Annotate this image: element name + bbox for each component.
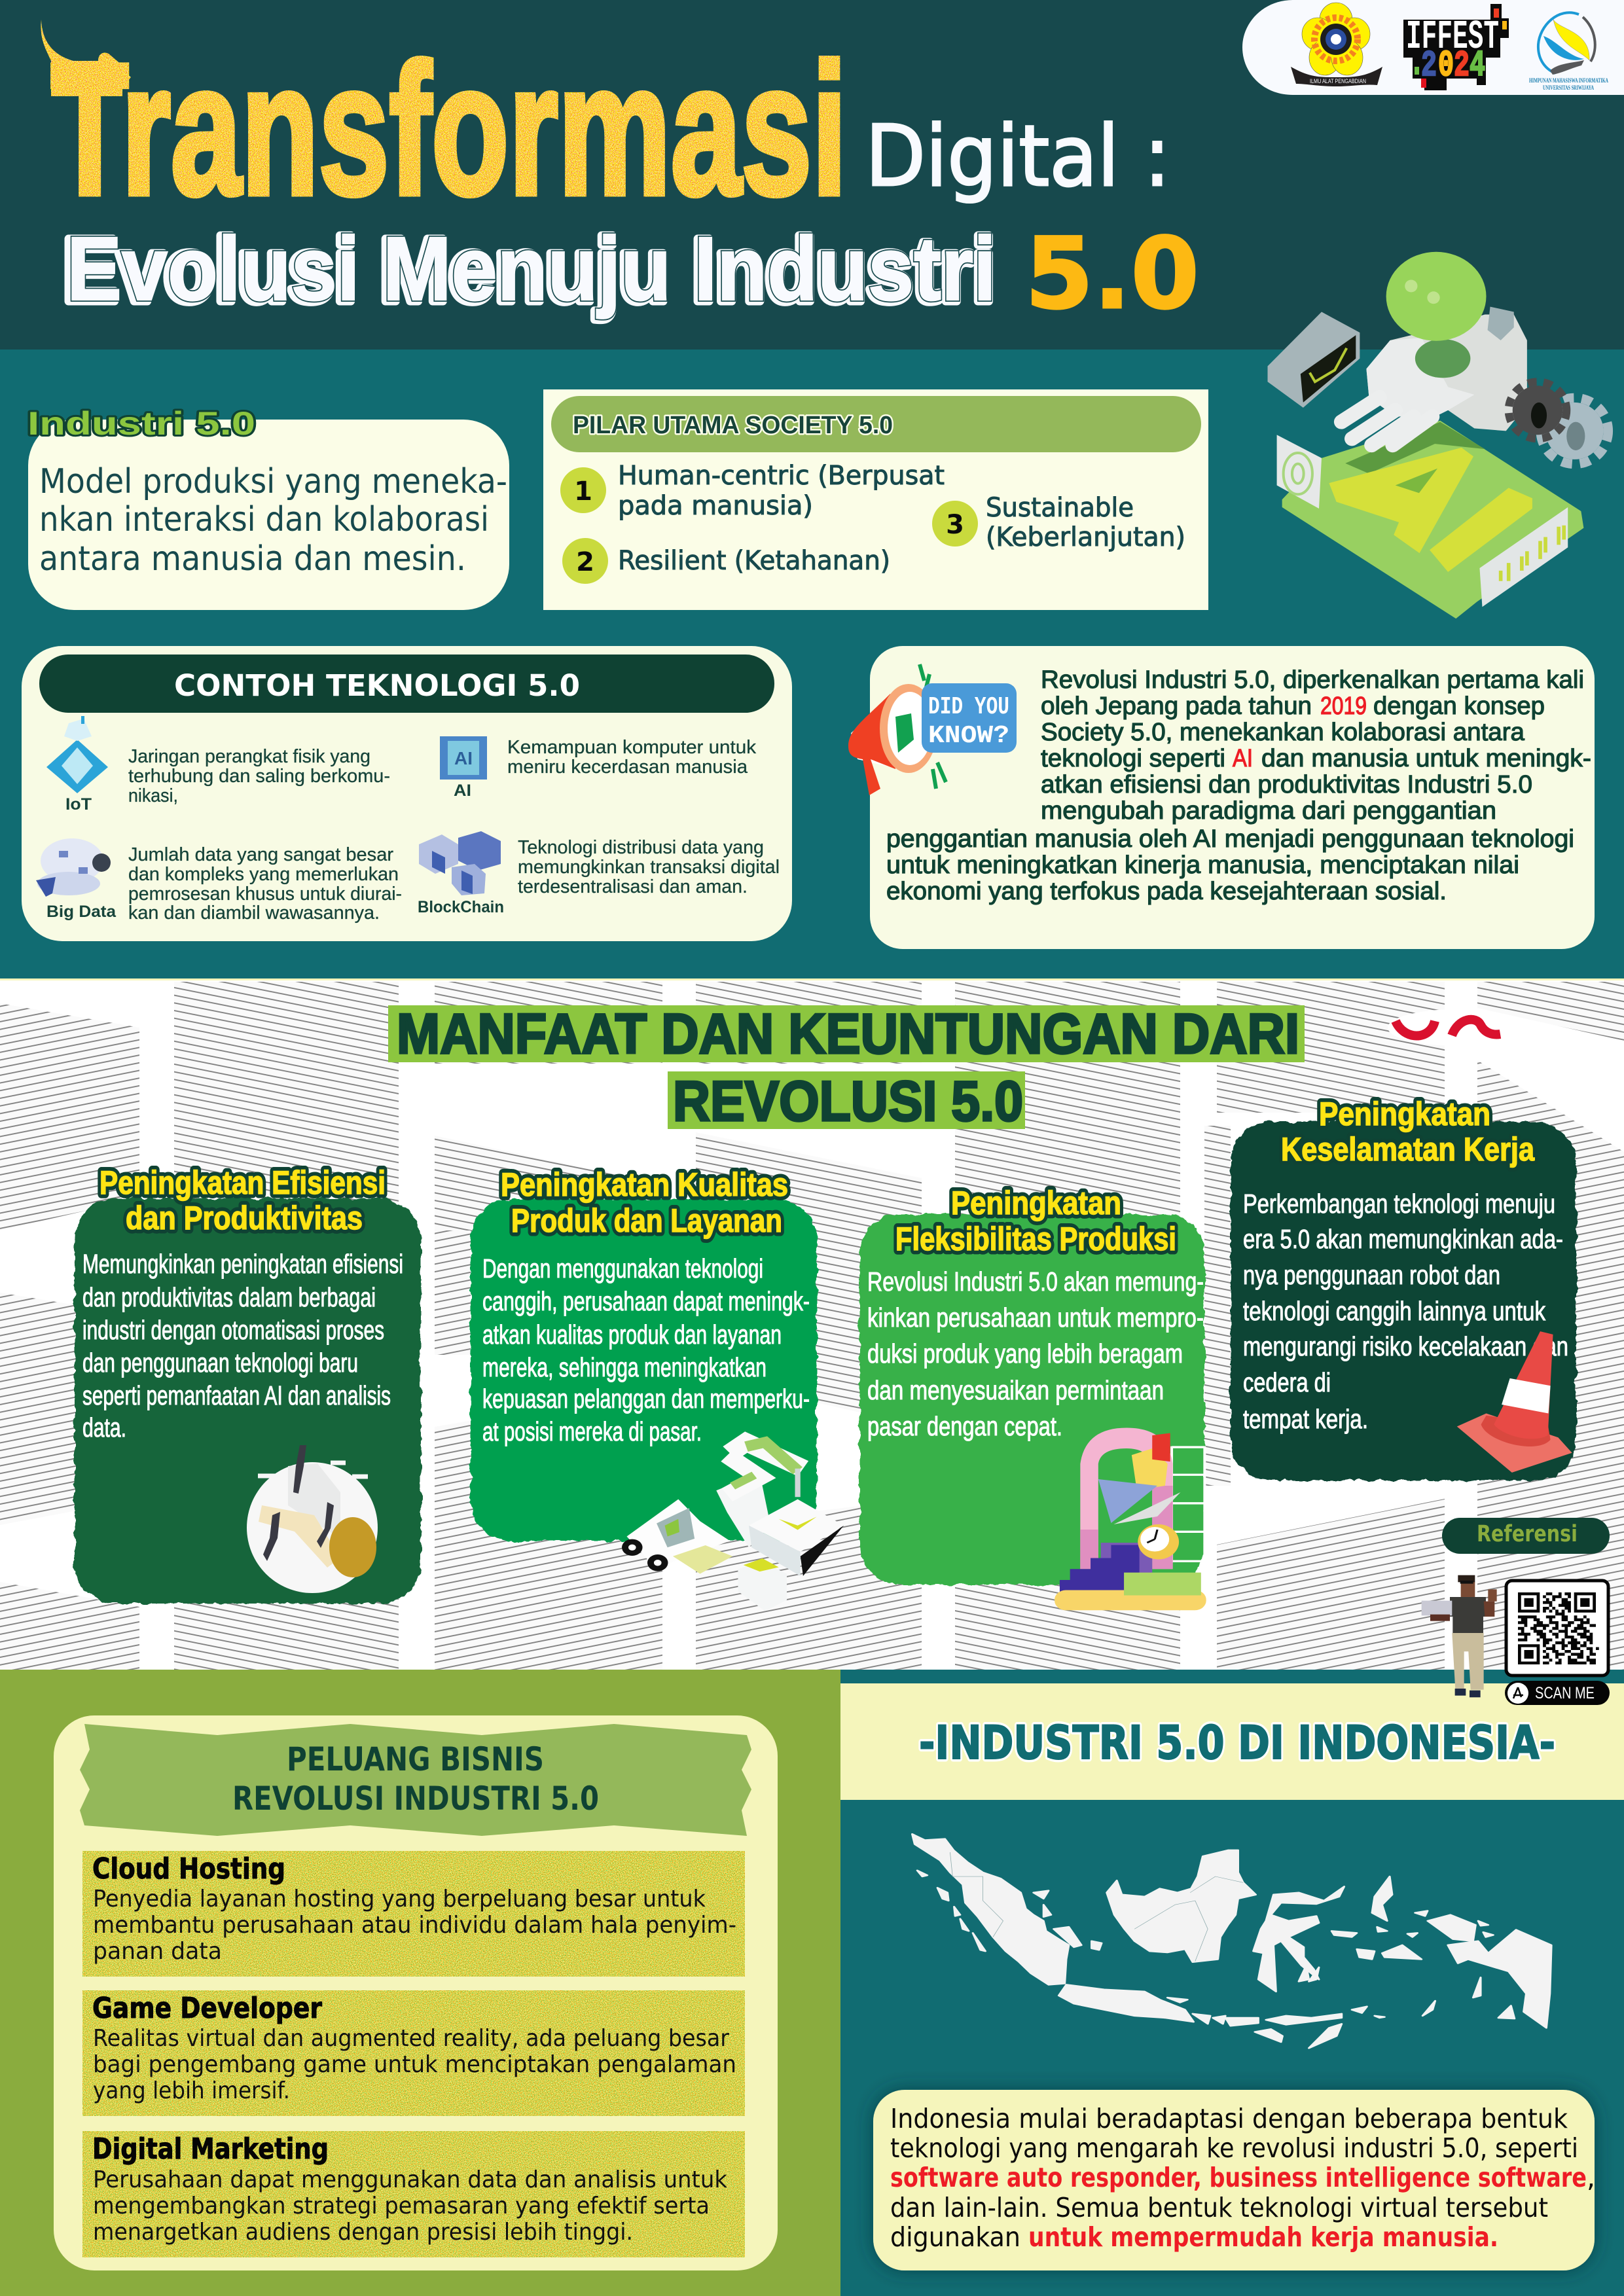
heading pill: PILAR UTAMA SOCIETY 5.0 xyxy=(573,412,893,439)
logo: IFFEST 2024: 4 xyxy=(1470,45,1485,86)
heading: Produk dan Layanan xyxy=(511,1202,782,1239)
icon: did you know badge xyxy=(922,683,1017,753)
card: Game Developer: Game Developer xyxy=(92,1992,322,2025)
text block: definition: antara manusia dan mesin. xyxy=(39,539,466,579)
text block xyxy=(1243,1189,1568,1434)
pill: Referensi xyxy=(1442,1518,1610,1554)
logo: IFFEST 2024: 2 xyxy=(1421,45,1437,86)
text block: cedera di xyxy=(1243,1367,1331,1397)
card: Cloud Hosting: Penyedia layanan hosting yang berpeluang besar untuk xyxy=(93,1886,706,1912)
logo: Himpunan Mahasiswa Informatika xyxy=(1529,12,1608,91)
text block: revolusi industri: untuk meningkatkan kinerja manusia, menciptakan nilai xyxy=(886,852,1519,879)
pillar 2: 2 xyxy=(576,547,594,577)
subtitle: Evolusi Menuju Industri: Evolusi Menuju Industri xyxy=(67,219,996,319)
item: AI: AI xyxy=(454,781,471,800)
icon: red squiggle mark xyxy=(1388,1009,1525,1046)
icon: factory robot and cart xyxy=(622,1443,844,1611)
text block: Revolusi Industri 5.0 akan memung- xyxy=(867,1266,1204,1297)
heading: Peningkatan xyxy=(951,1185,1121,1221)
item: BlockChain xyxy=(418,831,780,916)
heading: Peningkatan xyxy=(951,1185,1121,1221)
heading banner xyxy=(80,1724,751,1836)
text block: nya penggunaan robot dan xyxy=(1243,1260,1500,1290)
text block: revolusi industri: mengubah paradigma dari penggantian xyxy=(1041,797,1496,825)
heading xyxy=(501,1166,788,1239)
text block: kepuasan pelanggan dan memperku- xyxy=(482,1384,810,1414)
text box: Indonesia: dan lain-lain. Semua bentuk teknologi virtual tersebut xyxy=(890,2192,1548,2223)
panel: Peluang Bisnis xyxy=(54,1715,778,2270)
pillar 1 xyxy=(560,461,945,521)
heading: Peningkatan Kualitas xyxy=(501,1166,788,1203)
card: Game Developer: Realitas virtual dan augmented reality, ada peluang besar xyxy=(93,2025,729,2052)
logo: Himpunan Mahasiswa Informatika: UNIVERSITAS SRIWIJAYA xyxy=(1543,84,1594,91)
header band xyxy=(0,0,1624,350)
QR code xyxy=(1506,1581,1608,1676)
panel: Industri 5.0 xyxy=(27,405,509,610)
text block: kinkan perusahaan untuk mempro- xyxy=(867,1302,1204,1333)
icon: coin and climbers xyxy=(247,1445,378,1593)
heading: Fleksibilitas Produksi xyxy=(895,1221,1176,1257)
item: BlockChain: Teknologi distribusi data yang xyxy=(518,837,764,858)
pillar 3: 3 xyxy=(946,510,964,540)
heading: Peningkatan Kualitas xyxy=(501,1166,788,1203)
item: Big Data: dan kompleks yang memerlukan xyxy=(128,864,399,885)
text box: Indonesia: digunakan xyxy=(890,2221,1020,2253)
item: Big Data: Big Data xyxy=(46,903,117,921)
panel: benefit 3 xyxy=(859,1185,1206,1610)
pill: Referensi: Referensi xyxy=(1477,1521,1578,1547)
title xyxy=(41,20,1199,331)
panel: benefit 4 xyxy=(1231,1096,1576,1480)
logo: Universitas Sriwijaya xyxy=(1291,3,1382,86)
heading: Fleksibilitas Produksi xyxy=(895,1221,1176,1257)
icon: did you know badge: KNOW? xyxy=(928,722,1009,750)
icon: IoT gem xyxy=(46,716,108,793)
heading banner: PELUANG BISNIS xyxy=(287,1740,544,1778)
text block: definition: nkan interaksi dan kolaborasi xyxy=(39,500,489,539)
icon: man with laptop xyxy=(1422,1575,1497,1697)
text block: data. xyxy=(82,1412,126,1443)
heading banner: REVOLUSI INDUSTRI 5.0 xyxy=(232,1780,599,1818)
heading: Peningkatan xyxy=(1319,1096,1490,1132)
icon: arch with stairs xyxy=(1055,1428,1206,1610)
card: Cloud Hosting: panan data xyxy=(93,1938,222,1965)
pillar 2: Resilient (Ketahanan) xyxy=(618,546,890,576)
pillar 3: (Keberlanjutan) xyxy=(986,522,1185,552)
title ornament: horn xyxy=(41,20,131,96)
icon: megaphone xyxy=(848,664,946,795)
heading xyxy=(1281,1096,1535,1168)
text block: dan menyesuaikan permintaan xyxy=(867,1375,1164,1405)
logo: IFFEST 2024: IFFEST xyxy=(1406,14,1499,60)
section: manfaat background xyxy=(0,978,1624,1670)
item: IoT: nikasi, xyxy=(128,785,178,806)
text block xyxy=(482,1253,810,1446)
text block: definition: Model produksi yang meneka- xyxy=(39,462,507,501)
text block xyxy=(82,1249,403,1443)
item: Big Data: kan dan diambil wawasannya. xyxy=(128,903,380,924)
section: peluang bisnis background xyxy=(0,1670,840,2296)
icon: blockchain cubes xyxy=(419,831,501,895)
heading: Manfaat dan Keuntungan: MANFAAT DAN KEUNTUNGAN DARI xyxy=(397,1003,1299,1066)
text block: duksi produk yang lebih beragam xyxy=(867,1338,1183,1369)
text block: revolusi industri: dengan konsep xyxy=(1373,692,1545,720)
text box: Indonesia: , xyxy=(1587,2162,1595,2193)
card: Game Developer: bagi pengembang game untuk menciptakan pengalaman xyxy=(93,2051,736,2078)
text block: Dengan menggunakan teknologi xyxy=(482,1253,763,1283)
text block: revolusi industri: penggantian manusia oleh AI menjadi penggunaan teknologi xyxy=(886,825,1574,853)
subtitle: Evolusi Menuju Industri: Evolusi Menuju Industri xyxy=(67,219,996,319)
card: Digital Marketing: mengembangkan strategi pemasaran yang efektif serta xyxy=(93,2193,710,2219)
heading: Industri 5.0: Industri 5.0 xyxy=(27,405,255,442)
text block: Memungkinkan peningkatan efisiensi xyxy=(82,1249,403,1279)
text block: revolusi industri: atkan efisiensi dan produktivitas Industri 5.0 xyxy=(1041,771,1532,798)
pillar 3 xyxy=(932,493,1185,552)
item: BlockChain: memungkinkan transaksi digital xyxy=(518,857,780,878)
panel: benefit 2 xyxy=(471,1166,844,1611)
text block: mereka, sehingga meningkatkan xyxy=(482,1352,767,1382)
panel: Did you know xyxy=(848,646,1595,949)
pillar 2 xyxy=(562,538,890,584)
pillar 3: Sustainable xyxy=(986,493,1134,523)
item: BlockChain: BlockChain xyxy=(418,898,504,916)
title word: Transformasi: Transformasi xyxy=(51,26,847,234)
item: IoT xyxy=(46,716,390,814)
card: Game Developer: yang lebih imersif. xyxy=(93,2077,290,2104)
text block: dan produktivitas dalam berbagai xyxy=(82,1282,376,1312)
text block: revolusi industri: ekonomi yang terfokus pada kesejahteraan sosial. xyxy=(886,878,1447,905)
icon: traffic cone xyxy=(1457,1331,1572,1473)
text block xyxy=(867,1266,1204,1441)
text box: Indonesia xyxy=(873,2090,1595,2270)
heading: Manfaat dan Keuntungan xyxy=(388,1003,1305,1133)
card: Game Developer xyxy=(82,1990,745,2116)
card: Digital Marketing: Perusahaan dapat menggunakan data dan analisis untuk xyxy=(93,2166,727,2193)
heading pill xyxy=(39,655,774,713)
text block: definition xyxy=(39,462,507,579)
subtitle: Evolusi Menuju Industri: Evolusi Menuju Industri xyxy=(63,220,995,321)
pill: Scan Me xyxy=(1505,1681,1610,1705)
section heading band: Industri 5.0 di Indonesia xyxy=(840,1683,1624,1800)
text box: Indonesia: untuk mempermudah kerja manusia. xyxy=(1028,2221,1498,2253)
heading: Keselamatan Kerja xyxy=(1281,1131,1535,1168)
heading: Peningkatan xyxy=(1319,1096,1490,1132)
icon: big data cloud xyxy=(36,838,111,897)
pillar 1: pada manusia) xyxy=(618,491,813,521)
text box: Indonesia: Indonesia mulai beradaptasi dengan beberapa bentuk xyxy=(890,2103,1568,2134)
text block: industri dengan otomatisasi proses xyxy=(82,1315,384,1345)
icon: AI robot hand illustration xyxy=(1268,252,1608,619)
card: Digital Marketing: menargetkan audiens dengan presisi lebih tinggi. xyxy=(93,2219,633,2246)
text block: revolusi industri: teknologi seperti xyxy=(1041,745,1225,772)
heading pill xyxy=(551,396,1201,452)
card: Digital Marketing: Digital Marketing xyxy=(92,2132,329,2166)
panel: Pilar Utama Society 5.0 xyxy=(543,389,1208,610)
text block: Perkembangan teknologi menuju xyxy=(1243,1189,1555,1219)
heading pill: CONTOH TEKNOLOGI 5.0 xyxy=(174,668,580,703)
subtitle number: 5.0: 5.0 xyxy=(1025,217,1199,331)
heading: Peningkatan Efisiensi xyxy=(99,1164,386,1201)
icon: did you know badge: DID YOU xyxy=(928,693,1009,721)
heading: dan Produktivitas xyxy=(126,1200,363,1236)
item: Big Data xyxy=(36,838,402,924)
text block: dan penggunaan teknologi baru xyxy=(82,1348,358,1378)
text block: atkan kualitas produk dan layanan xyxy=(482,1319,782,1350)
item: Big Data: Jumlah data yang sangat besar xyxy=(128,844,393,865)
item: IoT: terhubung dan saling berkomu- xyxy=(128,766,390,787)
pillar 1: 1 xyxy=(574,476,592,507)
item: AI: Kemampuan komputer untuk xyxy=(507,737,757,758)
text block: revolusi industri: Revolusi Industri 5.0, diperkenalkan pertama kali xyxy=(1041,666,1584,694)
item: Big Data: pemrosesan khusus untuk diurai- xyxy=(128,884,402,905)
item: IoT: Jaringan perangkat fisik yang xyxy=(128,746,370,767)
heading: Produk dan Layanan xyxy=(511,1202,782,1239)
text block: revolusi industri xyxy=(886,666,1591,905)
item: BlockChain: terdesentralisasi dan aman. xyxy=(518,876,748,897)
heading: Peningkatan Efisiensi xyxy=(99,1164,386,1201)
logo: IFFEST 2024: 0 xyxy=(1438,45,1454,86)
text block: revolusi industri: dan manusia untuk meningk- xyxy=(1261,745,1591,772)
map: Indonesia xyxy=(912,1834,1551,2048)
item: AI: meniru kecerdasan manusia xyxy=(507,757,748,778)
pillar 1: Human-centric (Berpusat xyxy=(618,461,945,491)
item: IoT: IoT xyxy=(65,795,92,814)
heading xyxy=(895,1185,1176,1257)
logo: Universitas Sriwijaya: ILMU ALAT PENGABDIAN xyxy=(1310,78,1366,84)
text block: revolusi industri: Society 5.0, menekankan kolaborasi antara xyxy=(1041,719,1525,746)
item: AI xyxy=(440,736,757,800)
icon: AI chip: AI xyxy=(454,748,473,768)
card: Cloud Hosting: membantu perusahaan atau individu dalam hala penyim- xyxy=(93,1912,736,1939)
text block: revolusi industri: 2019 xyxy=(1320,692,1367,720)
heading: Keselamatan Kerja xyxy=(1281,1131,1535,1168)
pill: Scan Me: SCAN ME xyxy=(1535,1684,1595,1702)
logo: IFFEST 2024: 2 xyxy=(1454,45,1470,86)
text block: revolusi industri: oleh Jepang pada tahun xyxy=(1041,692,1312,720)
heading: dan Produktivitas xyxy=(126,1200,363,1236)
text block: at posisi mereka di pasar. xyxy=(482,1416,702,1446)
text block: seperti pemanfaatan AI dan analisis xyxy=(82,1380,391,1410)
icon: AI chip xyxy=(440,736,487,780)
text block: tempat kerja. xyxy=(1243,1404,1368,1434)
panel: Contoh Teknologi 5.0 xyxy=(22,646,792,941)
card: Cloud Hosting: Cloud Hosting xyxy=(92,1852,285,1886)
title word: Digital: Digital : xyxy=(865,108,1170,206)
text block: canggih, perusahaan dapat meningk- xyxy=(482,1286,810,1316)
text block: revolusi industri: AI xyxy=(1233,745,1253,772)
heading: Manfaat dan Keuntungan: REVOLUSI 5.0 xyxy=(673,1070,1023,1133)
text block: pasar dengan cepat. xyxy=(867,1411,1062,1441)
referensi group xyxy=(1422,1518,1610,1705)
logo: IFFEST 2024 xyxy=(1403,4,1509,90)
heading xyxy=(99,1164,386,1236)
panel: benefit 1 xyxy=(75,1164,421,1604)
text block: teknologi canggih lainnya untuk xyxy=(1243,1296,1545,1326)
logo panel xyxy=(1242,0,1624,95)
card: Cloud Hosting xyxy=(82,1851,745,1977)
card: Digital Marketing xyxy=(82,2131,745,2257)
